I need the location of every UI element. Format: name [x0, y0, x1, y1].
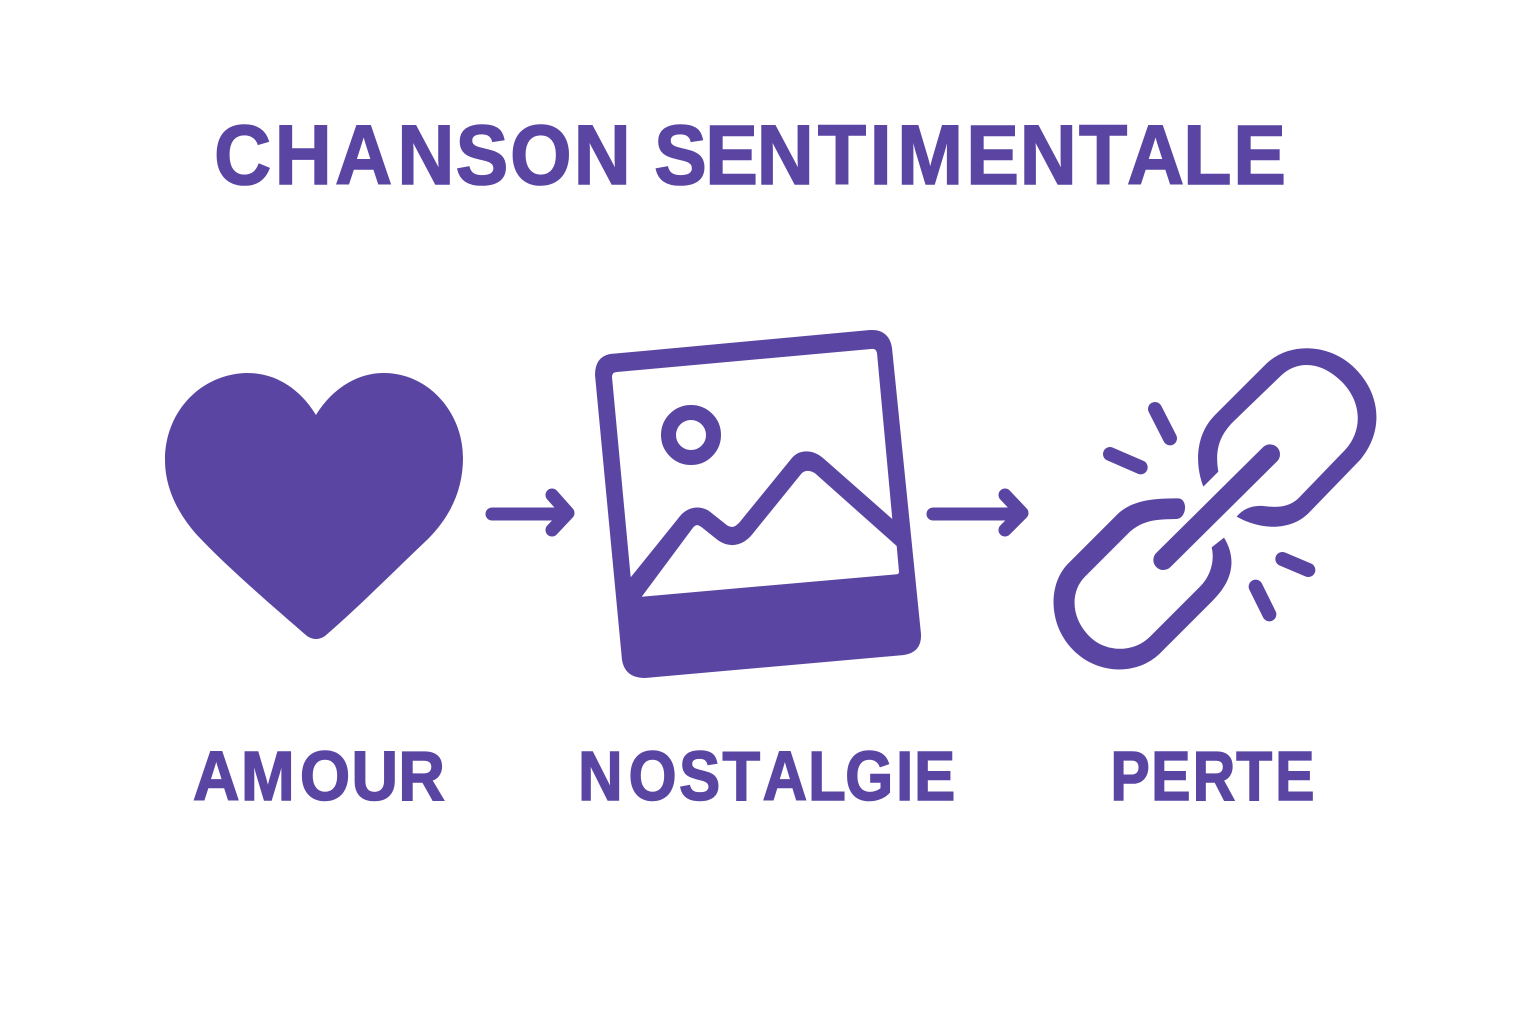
label: nostalgie: NOSTALGIE	[578, 736, 955, 815]
label: perte: PERTE	[1110, 736, 1315, 815]
arrow: nostalgie to perte	[933, 495, 1022, 530]
label: amour: AMOUR	[193, 738, 445, 816]
center bar	[1163, 454, 1270, 560]
icon: photo	[595, 330, 921, 678]
title: CHANSON SENTIMENTALE	[214, 109, 1286, 203]
icon: broken chain link	[1054, 348, 1376, 669]
lower link	[1054, 498, 1231, 669]
spark strokes	[1110, 409, 1308, 614]
arrow: amour to nostalgie	[492, 495, 568, 530]
upper link	[1198, 348, 1376, 527]
icon: heart	[165, 373, 463, 639]
icon detail: sun	[668, 412, 714, 458]
